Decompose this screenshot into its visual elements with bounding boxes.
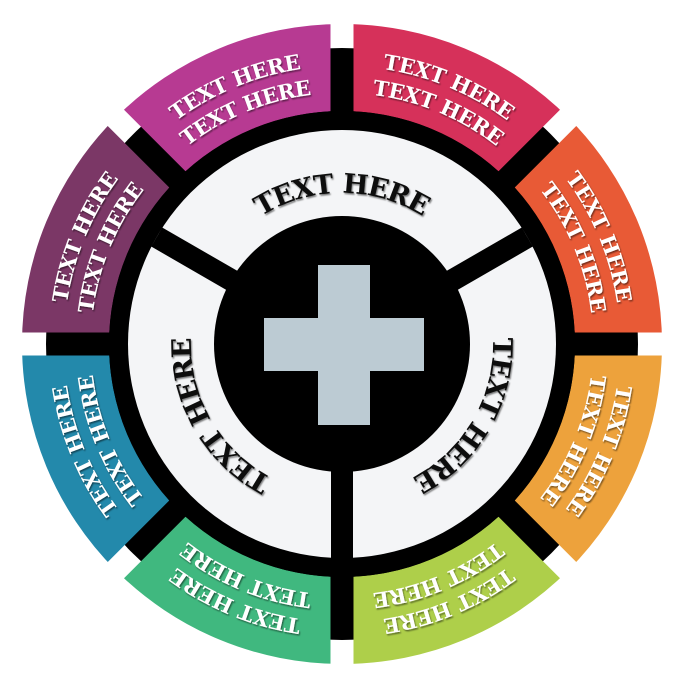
outer segment texts: TEXT HERE bbox=[168, 54, 302, 120]
segment: green bbox=[116, 509, 342, 664]
outer segment texts: TEXT HERE bbox=[373, 544, 508, 610]
segment: red bbox=[354, 24, 560, 172]
inner ring texts: TEXT HERE bbox=[171, 338, 270, 497]
outer segment texts: TEXT HERE bbox=[384, 54, 517, 122]
black backing disc bbox=[46, 48, 638, 640]
outer segment texts: TEXT HERE bbox=[540, 376, 608, 509]
segment: orange bbox=[514, 356, 662, 562]
inner black ring bbox=[109, 111, 575, 577]
segment: lime bbox=[354, 516, 560, 664]
outer segment texts: TEXT HERE bbox=[168, 568, 301, 636]
segment: orange-red bbox=[514, 126, 662, 332]
outer segment texts: TEXT HERE bbox=[542, 180, 608, 315]
outer segment texts: TEXT HERE bbox=[78, 375, 144, 510]
segment: purple bbox=[22, 126, 170, 332]
outer segment texts: TEXT HERE bbox=[52, 170, 120, 303]
center black circle bbox=[214, 216, 470, 472]
ring dividers bbox=[157, 237, 527, 560]
outer segment texts: TEXT HERE bbox=[384, 569, 518, 636]
outer segment texts: TEXT HERE bbox=[566, 386, 634, 520]
inner ring texts bbox=[171, 172, 515, 497]
inner ring texts: TEXT HERE bbox=[413, 338, 515, 496]
outer segment texts: TEXT HERE bbox=[52, 386, 118, 520]
outer segment texts: TEXT HERE bbox=[78, 181, 145, 314]
outer segment texts: TEXT HERE bbox=[374, 80, 506, 148]
outer segment texts: TEXT HERE bbox=[178, 80, 312, 146]
inner ring texts: TEXT HERE bbox=[252, 172, 433, 218]
segment: magenta bbox=[124, 24, 330, 172]
outer segment texts: TEXT HERE bbox=[568, 170, 634, 305]
outer segment texts: TEXT HERE bbox=[179, 542, 312, 610]
light ring bbox=[128, 130, 556, 558]
segment: teal bbox=[22, 356, 170, 562]
icon: plus cross bbox=[264, 265, 424, 425]
outer segment texts bbox=[52, 54, 634, 636]
